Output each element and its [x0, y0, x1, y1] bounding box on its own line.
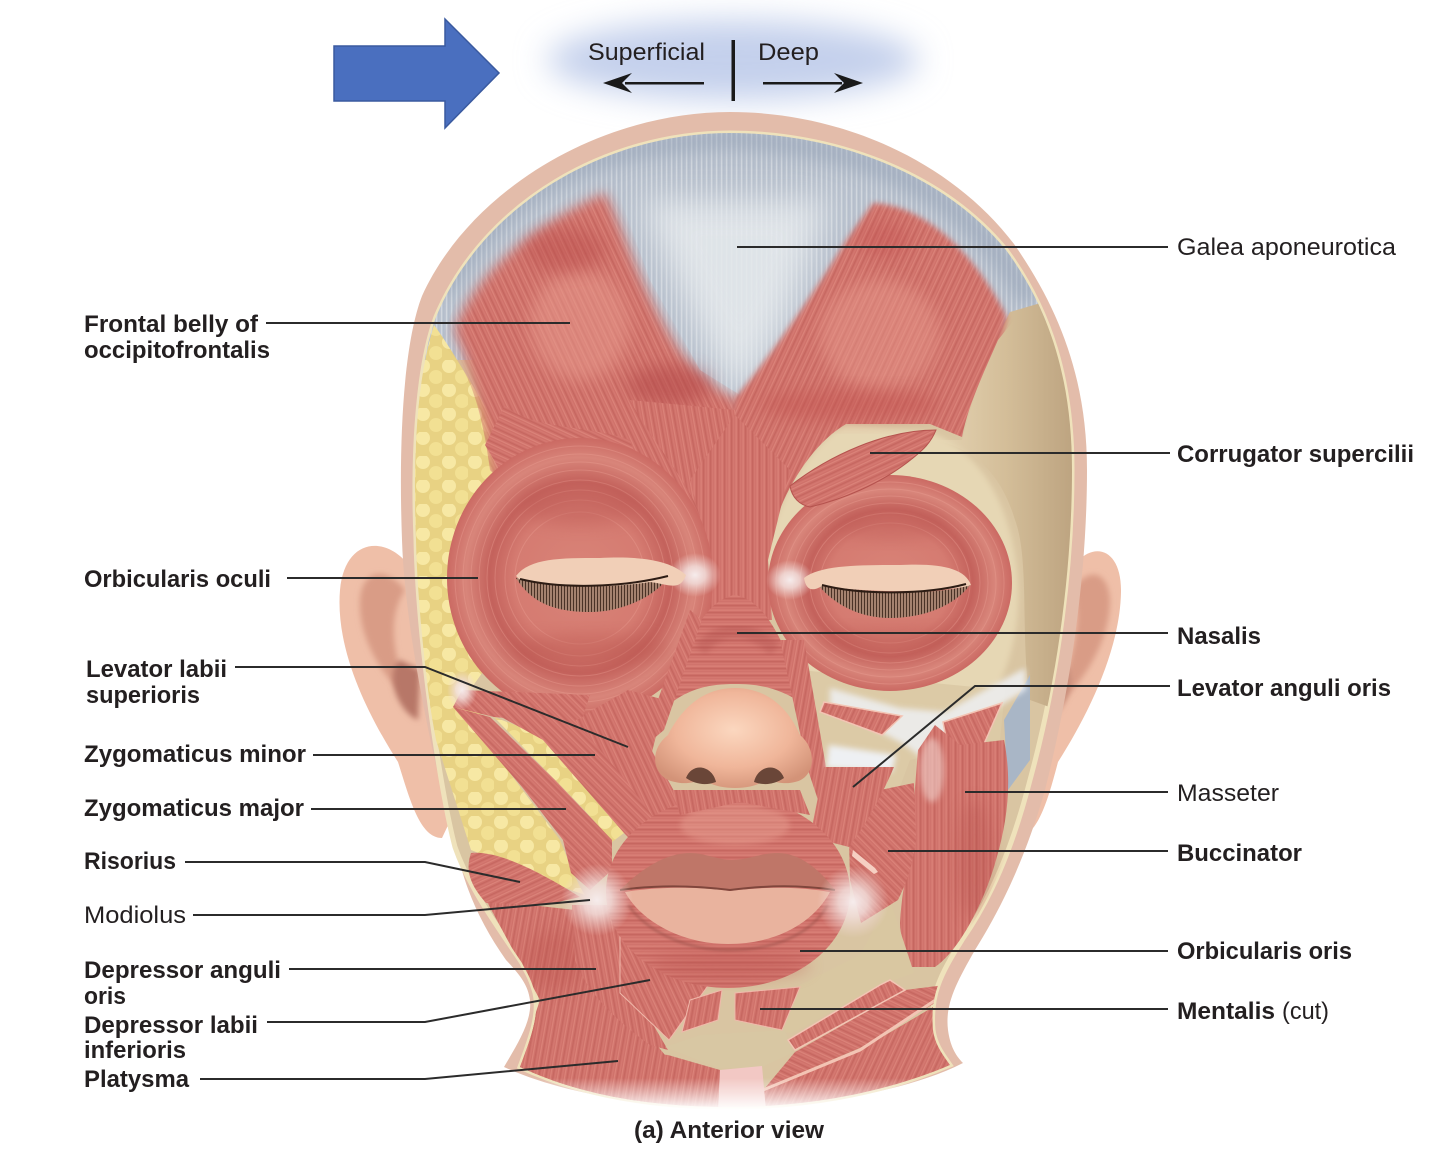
cut mentalis	[682, 987, 800, 1032]
procerus flap	[630, 400, 735, 501]
label: Masseter: Masseter	[1177, 780, 1279, 807]
right nostril	[754, 767, 784, 784]
label: Superficial: Superficial	[588, 39, 705, 66]
muscle underlay below left orbit	[453, 690, 590, 720]
label: Orbicularis oris: Orbicularis oris	[1177, 938, 1352, 965]
risorius	[469, 853, 580, 905]
zygomaticus major	[453, 707, 612, 890]
lower right beige	[900, 932, 912, 967]
muscle underlay beside nose	[579, 690, 658, 816]
cheek beige under right eye	[810, 671, 986, 708]
left modiolus	[561, 864, 633, 936]
icon: large blue arrow	[334, 19, 499, 128]
head illustration	[339, 112, 1121, 1110]
label: Levator labii superioris: superioris	[86, 682, 200, 709]
throat	[718, 1066, 766, 1110]
label: Nasalis: Nasalis	[1177, 623, 1261, 650]
label: Platysma: Platysma	[84, 1066, 190, 1093]
left nostril	[686, 767, 716, 784]
left labels	[84, 311, 650, 1093]
label: Levator labii superioris: Levator labii	[86, 656, 227, 683]
right modiolus	[817, 866, 889, 938]
depressor labii inferioris	[620, 933, 712, 1040]
superficial / deep direction key	[547, 20, 919, 101]
divider bar	[732, 40, 735, 101]
label: Depressor anguli oris	[84, 957, 596, 1010]
label: Frontal belly of occipitofrontalis	[84, 311, 570, 364]
levator labii superioris	[575, 707, 686, 832]
label: Platysma	[84, 1061, 618, 1093]
right eye	[766, 560, 971, 618]
left neck and lower cheek	[488, 903, 665, 1100]
lashes	[818, 585, 970, 618]
label: Mentalis (cut): Mentalis	[1177, 998, 1275, 1025]
lip shadow	[628, 905, 828, 950]
right frontal belly	[732, 199, 1010, 508]
cut zygomaticus right	[943, 703, 1002, 753]
nasalis	[674, 595, 792, 700]
right neck platysma	[763, 980, 965, 1107]
masseter	[900, 725, 1008, 967]
yellow fat	[414, 325, 624, 895]
left eye	[516, 553, 721, 612]
label: Depressor anguli oris: Depressor anguli	[84, 957, 281, 984]
small cut buccinator tag	[852, 850, 878, 874]
skin outline of head and neck	[401, 112, 1087, 1107]
left nasal strip	[656, 610, 701, 737]
pale brow-to-cheek fascia	[768, 425, 1018, 688]
zygomaticus minor	[502, 718, 652, 837]
lower lip	[625, 888, 830, 944]
brow band over left orbit	[485, 408, 632, 467]
subcutaneous outline band	[415, 133, 1072, 1107]
depressor anguli oris	[572, 905, 668, 1050]
label: Mentalis (cut): (cut)	[1282, 998, 1329, 1025]
beige chin	[665, 1046, 667, 1048]
galea aponeurotica	[424, 133, 1046, 405]
central forehead-to-nose column	[690, 415, 790, 620]
left tendon patch	[448, 672, 476, 709]
cut levator labii right	[820, 702, 902, 735]
white tendon fascia right	[826, 668, 1026, 772]
label: Frontal belly of occipitofrontalis: Frontal belly of	[84, 311, 259, 338]
clipped anatomy	[400, 120, 1085, 1110]
label: Orbicularis oculi: Orbicularis oculi	[84, 566, 271, 593]
tendon	[766, 560, 814, 600]
label: Risorius	[84, 848, 520, 882]
arrow: deep	[763, 73, 863, 93]
label: Corrugator supercilii: Corrugator supercilii	[1177, 441, 1414, 468]
label: Deep: Deep	[758, 39, 819, 66]
tendon	[669, 553, 721, 597]
label: Zygomaticus minor: Zygomaticus minor	[84, 741, 306, 768]
label: Buccinator: Buccinator	[1177, 840, 1302, 867]
label: Frontal belly of occipitofrontalis: occipitofrontalis	[84, 337, 270, 364]
lashes	[516, 575, 670, 612]
beige temple	[950, 304, 1072, 706]
left frontal belly	[448, 187, 738, 518]
neck fade	[490, 1078, 980, 1110]
nose	[655, 688, 812, 788]
levator anguli oris	[810, 767, 894, 847]
eyelid	[804, 565, 971, 591]
right labels	[737, 234, 1414, 1025]
label: Levator labii superioris	[86, 656, 628, 747]
right nasal strip	[780, 640, 826, 800]
orbicularis oris	[606, 796, 850, 988]
label: Depressor labii inferioris	[84, 980, 650, 1064]
blue glow behind key	[547, 20, 919, 100]
eyelid	[516, 558, 686, 586]
left ear	[339, 546, 460, 838]
corrugator supercilii	[790, 430, 936, 507]
buccinator	[849, 783, 916, 923]
arrow: superficial	[603, 73, 704, 93]
blue-grey fascia strip	[1004, 675, 1030, 790]
label: Modiolus	[84, 900, 590, 929]
label: Depressor labii inferioris: Depressor labii	[84, 1012, 258, 1039]
label: Depressor labii inferioris: inferioris	[84, 1037, 186, 1064]
left orbicularis oculi	[447, 438, 713, 718]
label: Mentalis (cut)	[760, 998, 1329, 1025]
label: Risorius: Risorius	[84, 848, 176, 875]
label: Levator anguli oris: Levator anguli oris	[1177, 675, 1391, 702]
label: Modiolus: Modiolus	[84, 902, 186, 929]
philtrum fibres	[672, 790, 810, 815]
forehead shading	[525, 222, 940, 421]
label: Depressor anguli oris: oris	[84, 983, 126, 1010]
label: Galea aponeurotica: Galea aponeurotica	[1177, 234, 1397, 261]
label: Levator anguli oris	[853, 675, 1391, 787]
lips	[620, 853, 835, 950]
right ear	[1010, 551, 1121, 838]
label: Zygomaticus major: Zygomaticus major	[84, 795, 304, 822]
right orbicularis oculi	[768, 475, 1012, 691]
platysma neck left	[520, 1014, 720, 1104]
caption: (a) Anterior view	[634, 1117, 824, 1144]
upper lip	[620, 853, 835, 890]
